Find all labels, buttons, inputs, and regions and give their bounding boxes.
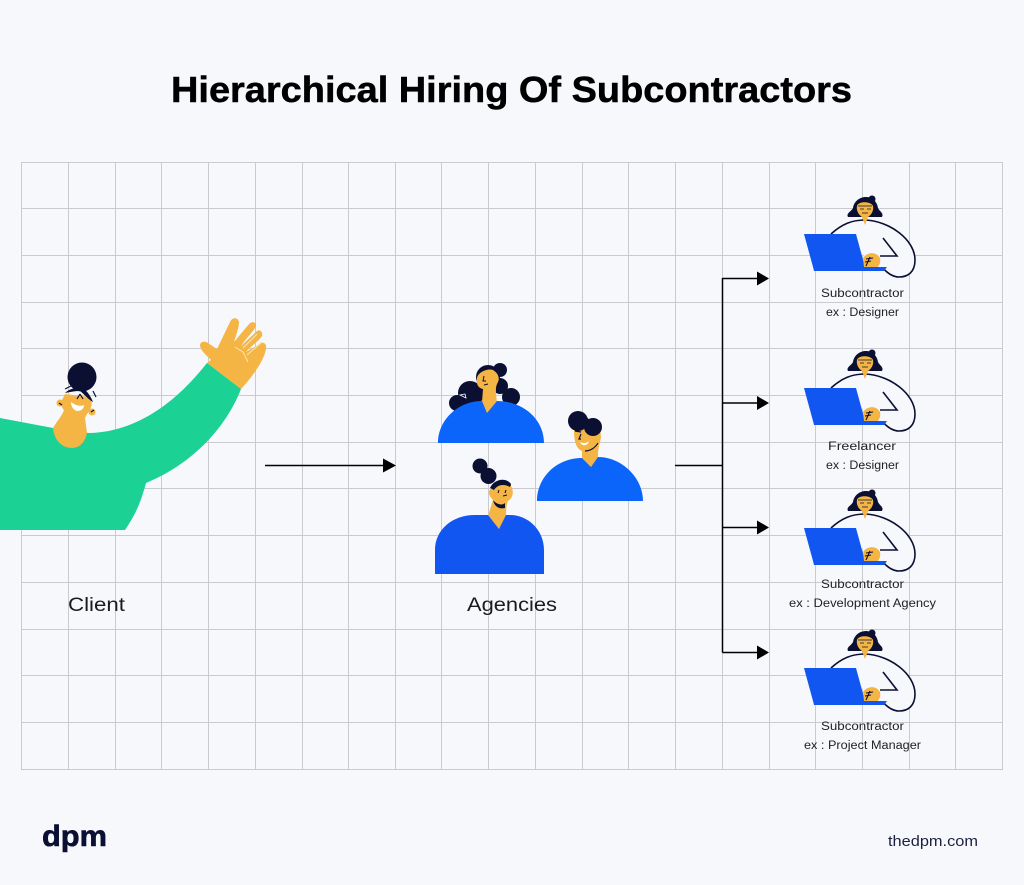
client hair bun (68, 362, 96, 392)
branching arrows (675, 272, 769, 660)
title: Hierarchical Hiring Of Subcontractors (171, 69, 852, 110)
subcontractor label 1: Subcontractor (821, 288, 904, 300)
freelancer label: ex : Designer (826, 460, 899, 472)
subcontractor label 3: ex : Development Agency (789, 598, 936, 610)
subcontractor label 4: ex : Project Manager (804, 740, 921, 752)
arrow: client to agencies (265, 458, 396, 472)
agency man (537, 411, 643, 501)
icon: subcontractor at laptop 3 (804, 490, 915, 571)
subcontractor label 3: Subcontractor (821, 579, 904, 591)
agencies group (435, 363, 643, 574)
agency woman with long hair (438, 363, 544, 443)
agencies label: Agencies (467, 594, 557, 616)
icon: subcontractor at laptop 4 (804, 630, 915, 711)
client label: Client (68, 594, 126, 616)
subcontractor label 4 (804, 721, 921, 752)
client figure (0, 318, 266, 530)
website url: thedpm.com (888, 833, 978, 850)
agency woman with bun (435, 458, 544, 574)
subcontractor label 1: ex : Designer (826, 307, 899, 319)
subcontractor label 4: Subcontractor (821, 721, 904, 733)
freelancer label (826, 441, 899, 472)
logo: dpm: dpm (42, 820, 107, 853)
icon: freelancer at laptop (804, 350, 915, 431)
client head and neck (53, 394, 92, 448)
client body (0, 363, 241, 530)
icon: subcontractor at laptop 1 (804, 196, 915, 277)
subcontractor label 1 (821, 288, 904, 319)
icon: client hand (200, 318, 266, 389)
freelancer label: Freelancer (828, 441, 896, 453)
subcontractor label 3 (789, 579, 936, 610)
